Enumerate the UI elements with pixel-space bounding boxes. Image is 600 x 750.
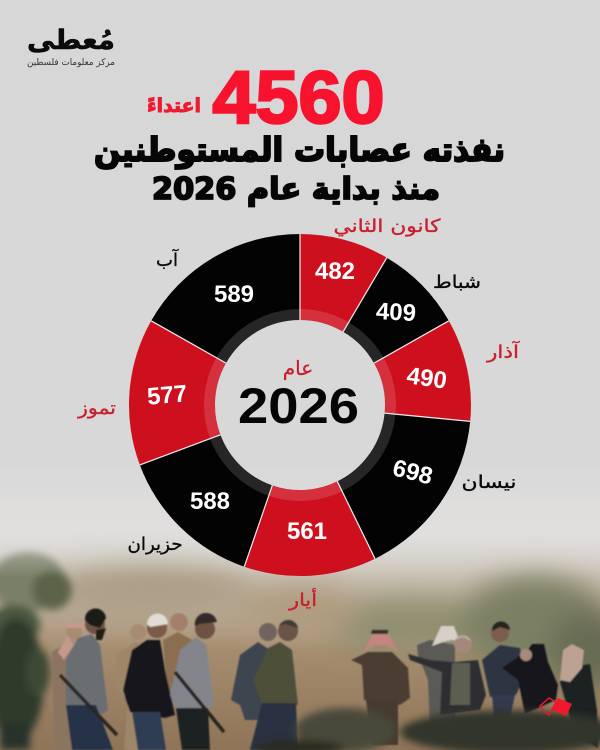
headline number: 4560 xyxy=(212,56,384,139)
man in red keffiyeh xyxy=(351,630,410,745)
logo xyxy=(27,25,115,68)
value: April: 698 xyxy=(390,455,435,490)
label: May: أيار xyxy=(288,588,317,611)
slice: August xyxy=(151,234,300,363)
heading xyxy=(94,56,505,207)
photo: settlers and villagers in olive grove xyxy=(0,500,600,750)
background settler xyxy=(116,624,150,750)
label: August: آب xyxy=(156,248,179,271)
left olive tree xyxy=(0,552,72,750)
man pointing xyxy=(408,635,486,715)
man with white keffiyeh xyxy=(417,626,460,730)
settler behind in keffiyeh xyxy=(52,623,84,750)
slice: May xyxy=(244,481,375,576)
value: March: 490 xyxy=(405,362,448,395)
foreground shrubs xyxy=(255,708,600,750)
slice: March xyxy=(374,321,471,421)
value: July: 577 xyxy=(146,380,188,411)
label: July: تموز xyxy=(77,398,116,419)
man in dark hoodie xyxy=(482,622,525,718)
label: March: آذار xyxy=(486,340,520,363)
center label: عام xyxy=(283,356,313,380)
woman in beige hijab xyxy=(560,644,598,748)
month labels xyxy=(77,216,520,611)
donut chart xyxy=(129,234,471,576)
woman in black hijab xyxy=(502,644,558,714)
settler in olive jacket xyxy=(250,620,298,750)
label: June: حزيران xyxy=(128,534,182,555)
villagers group xyxy=(351,622,598,748)
heading line 1: نفذته عصابات المستوطنين xyxy=(94,130,505,170)
value: January: 482 xyxy=(315,258,355,285)
logo subtitle: مركز معلومات فلسطين xyxy=(27,58,115,68)
center year: 2026 xyxy=(238,378,359,434)
background trees xyxy=(50,562,600,690)
settler in dark hoodie xyxy=(231,623,277,720)
settlers group xyxy=(52,608,298,750)
logo wordmark: مُعطى xyxy=(27,25,115,56)
slice: June xyxy=(140,435,272,567)
heading line 2: منذ بداية عام 2026 xyxy=(152,172,440,207)
slice: January xyxy=(300,234,387,332)
label: February: شباط xyxy=(433,272,481,293)
icon: small red logo mark xyxy=(540,698,572,716)
value: February: 409 xyxy=(375,298,417,327)
slice: July xyxy=(129,321,226,465)
label: April: نيسان xyxy=(462,472,516,493)
slice: February xyxy=(343,258,449,363)
value: May: 561 xyxy=(287,518,327,545)
settler in grey hoodie xyxy=(60,608,117,750)
settler in black hoodie xyxy=(123,614,175,750)
headline unit: اعتداءً xyxy=(147,95,201,117)
value: August: 589 xyxy=(214,281,254,308)
settler in light hoodie xyxy=(170,613,224,750)
label: January: كانون الثاني xyxy=(334,216,441,237)
ground haze xyxy=(0,530,600,750)
top fog xyxy=(0,500,600,578)
value: June: 588 xyxy=(190,488,230,515)
slice: April xyxy=(337,413,470,559)
